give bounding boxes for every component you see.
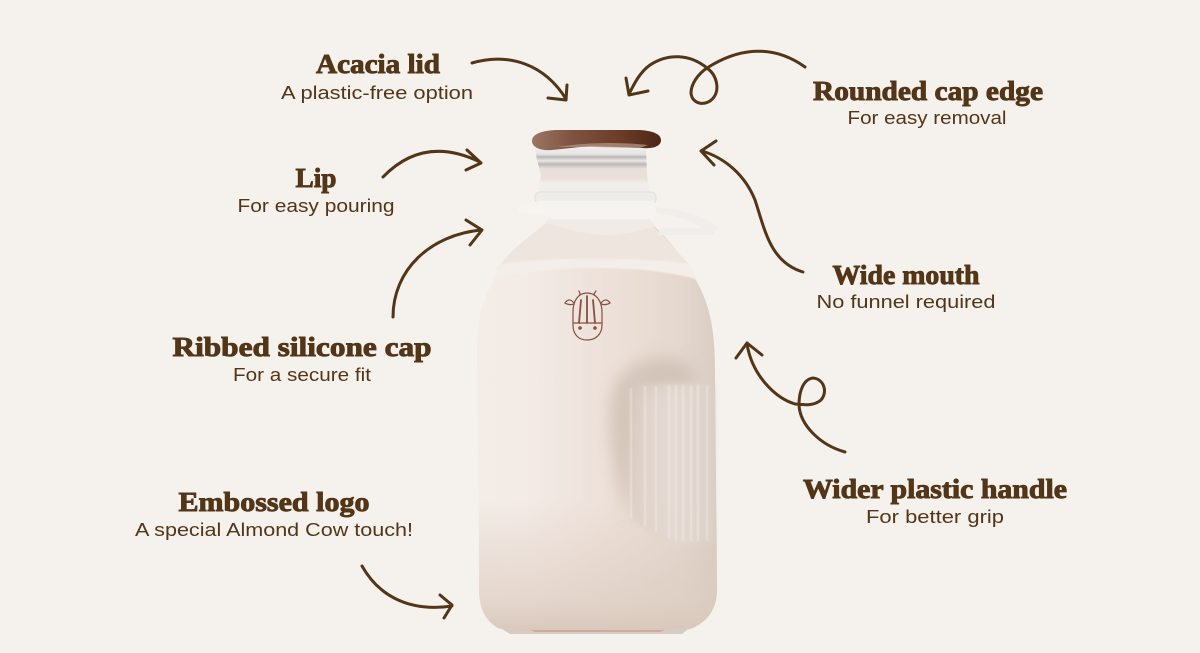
callout: embossed logo: A special Almond Cow touch!	[135, 519, 413, 540]
arrow: wide mouth	[701, 141, 803, 272]
callout: rounded cap edge	[813, 76, 1043, 128]
callout: ribbed silicone cap	[172, 332, 432, 385]
callout: ribbed silicone cap: Ribbed silicone cap	[172, 332, 432, 362]
arrow: rounded cap edge	[626, 51, 805, 103]
cow logo	[565, 291, 610, 340]
handle indentation	[610, 358, 714, 545]
neck	[535, 148, 656, 204]
callout: rounded cap edge: For easy removal	[848, 107, 1006, 128]
callout: lip: Lip	[296, 163, 336, 193]
arrow: acacia lid	[472, 59, 567, 100]
callout: wide mouth: No funnel required	[816, 291, 996, 312]
callout: wide mouth	[816, 260, 996, 312]
callout: embossed logo: Embossed logo	[178, 487, 370, 517]
bottle	[477, 130, 718, 634]
callout: ribbed silicone cap: For a secure fit	[233, 364, 371, 385]
arrow: lip	[383, 150, 481, 177]
plastic handle ring	[518, 201, 718, 236]
callout: wide mouth: Wide mouth	[832, 260, 980, 290]
callout: acacia lid	[281, 49, 473, 103]
callout: wider plastic handle: Wider plastic handle	[803, 474, 1067, 504]
callout: acacia lid: A plastic-free option	[281, 82, 473, 103]
acacia lid	[532, 130, 661, 150]
arrow: ribbed silicone cap	[393, 220, 482, 317]
callout: lip	[238, 163, 394, 216]
callout: rounded cap edge: Rounded cap edge	[813, 76, 1043, 106]
callout: acacia lid: Acacia lid	[316, 49, 440, 79]
callout: lip: For easy pouring	[238, 195, 394, 216]
callout: wider plastic handle	[803, 474, 1067, 527]
arrow: wider plastic handle	[736, 343, 845, 452]
arrow: embossed logo	[362, 566, 452, 618]
callout: wider plastic handle: For better grip	[866, 506, 1004, 527]
bottle body	[477, 220, 717, 634]
callout: embossed logo	[135, 487, 413, 540]
